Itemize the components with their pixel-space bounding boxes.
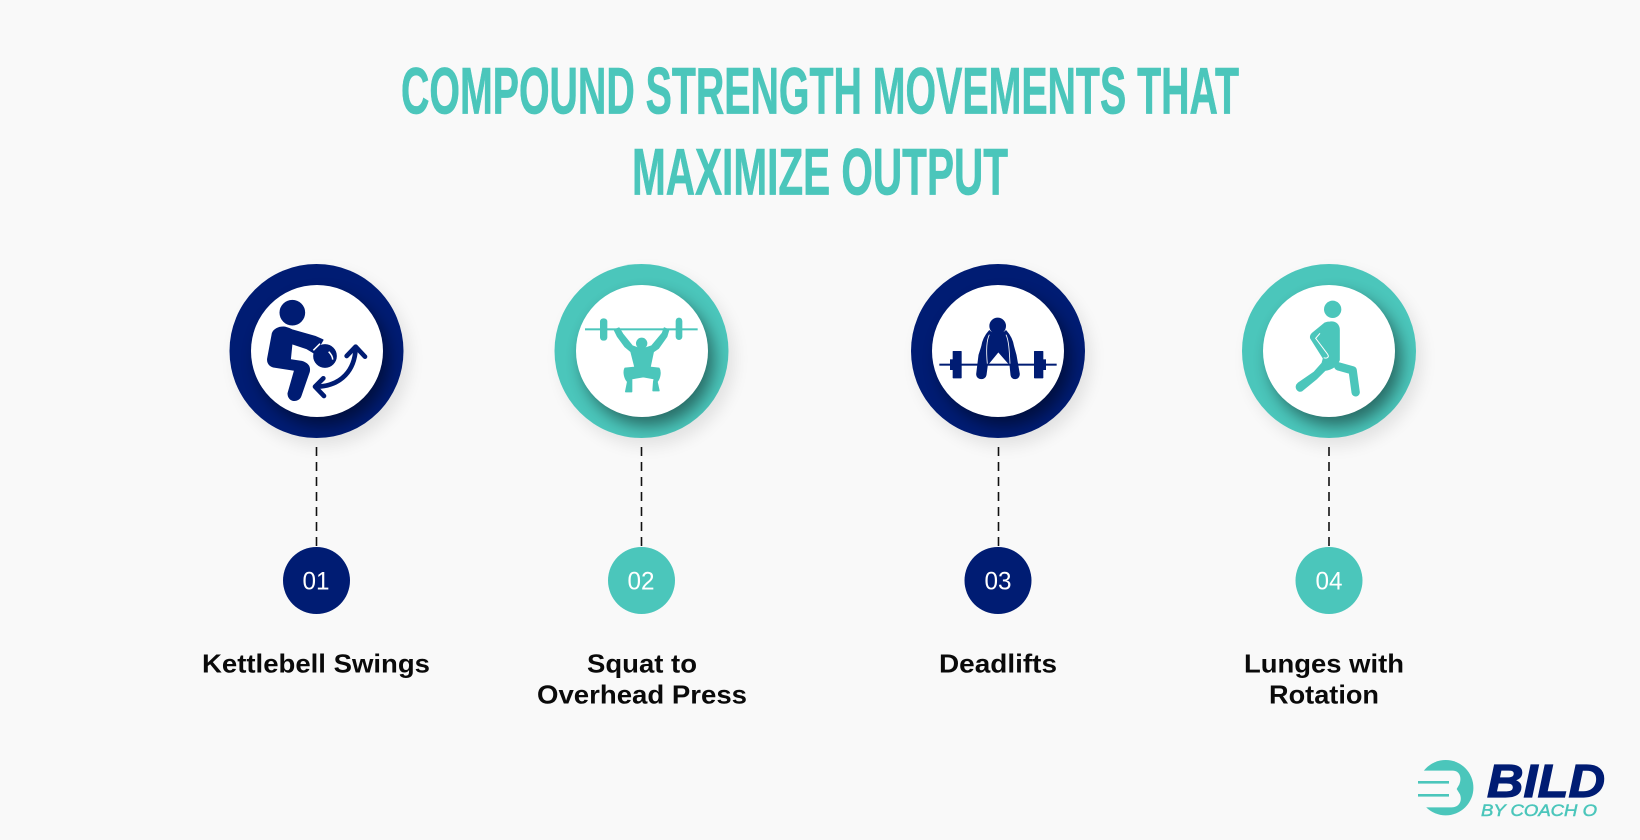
icon badge: deadlift bbox=[911, 264, 1091, 446]
logo: BILD by Coach O bbox=[1415, 755, 1605, 820]
label bbox=[537, 648, 747, 710]
number badge 01: 01 bbox=[302, 568, 330, 596]
title: MAXIMIZE OUTPUT bbox=[632, 134, 1008, 208]
number badge 01 bbox=[283, 547, 350, 614]
icon badge: lunge bbox=[1242, 264, 1422, 446]
icon badge: kettlebell swing bbox=[230, 264, 410, 446]
label: Rotation bbox=[1269, 680, 1379, 710]
logo tagline: BY COACH O bbox=[1481, 801, 1597, 820]
connector bbox=[640, 447, 642, 547]
label: Lunges with bbox=[1244, 648, 1404, 678]
step 3: deadlifts bbox=[911, 264, 1091, 678]
icon badge: overhead squat bbox=[554, 264, 734, 446]
number badge 02: 02 bbox=[628, 568, 654, 596]
step 2: squat to overhead press bbox=[537, 264, 747, 710]
logo mark bbox=[1415, 760, 1473, 815]
step 1: kettlebell swings bbox=[202, 264, 430, 678]
label: Deadlifts bbox=[939, 648, 1057, 678]
number badge 04 bbox=[1296, 547, 1362, 614]
connector bbox=[316, 447, 318, 547]
logo wordmark: BILD bbox=[1487, 755, 1605, 807]
number badge 03 bbox=[964, 547, 1032, 614]
number badge 03: 03 bbox=[984, 568, 1012, 596]
step 4: lunges with rotation bbox=[1242, 264, 1422, 710]
label: Overhead Press bbox=[537, 680, 747, 710]
label: Squat to bbox=[587, 648, 697, 678]
connector bbox=[998, 447, 1000, 547]
label: Kettlebell Swings bbox=[202, 648, 430, 678]
label bbox=[1244, 648, 1404, 710]
number badge 02 bbox=[608, 547, 675, 614]
title bbox=[401, 54, 1239, 208]
connector bbox=[1328, 447, 1330, 547]
number badge 04: 04 bbox=[1316, 568, 1343, 596]
infographic canvas bbox=[204, 66, 1604, 816]
